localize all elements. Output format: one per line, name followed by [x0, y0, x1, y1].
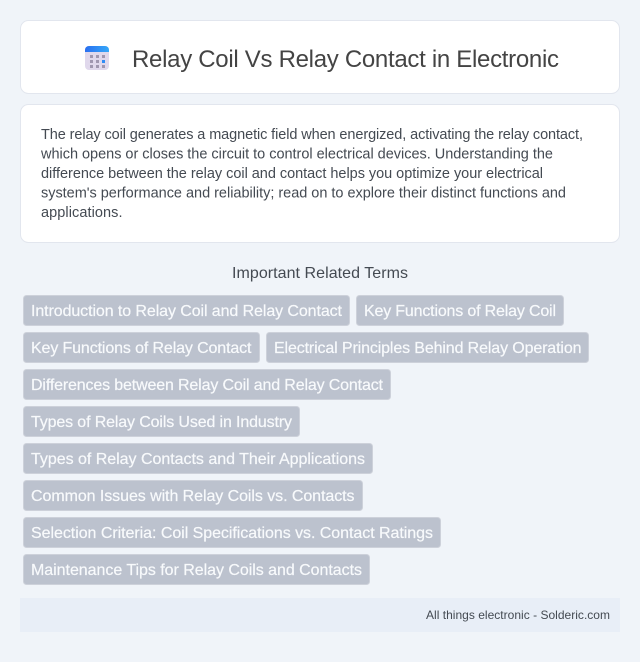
tag: maintenance tips — [24, 554, 370, 584]
tag: common issues — [24, 480, 362, 510]
tag: types of coils: Types of Relay Coils Used in Industry — [31, 414, 292, 431]
tag: selection criteria: Selection Criteria: Coil Specifications vs. Contact Ratings — [31, 525, 433, 542]
tag: functions of contact: Key Functions of Relay Contact — [31, 340, 252, 357]
text block: description — [40, 127, 583, 221]
tag: electrical principles — [266, 332, 588, 362]
tag: functions of coil: Key Functions of Relay Coil — [364, 303, 556, 320]
text block: description: system's performance and reliability; read on to explore their distinct functions and — [41, 186, 566, 202]
panel: header — [20, 20, 620, 94]
footer credit: All things electronic - Solderic.com — [426, 608, 610, 622]
tag: common issues: Common Issues with Relay Coils vs. Contacts — [31, 488, 354, 505]
text block: description: which opens or closes the circuit to control electrical devices. Understanding the — [40, 146, 553, 162]
tag: functions of contact — [24, 332, 260, 362]
panel: description — [20, 104, 620, 242]
tag: types of contacts: Types of Relay Contacts and Their Applications — [31, 451, 365, 468]
text block: description: The relay coil generates a magnetic field when energized, activating the relay contact, — [41, 127, 583, 143]
footer — [20, 598, 620, 632]
tag list — [24, 296, 588, 584]
title: Relay Coil Vs Relay Contact in Electronic — [132, 46, 559, 73]
tag: differences: Differences between Relay Coil and Relay Contact — [31, 377, 384, 394]
tag: differences — [24, 370, 390, 400]
tag: selection criteria — [24, 518, 440, 548]
tag: electrical principles: Electrical Principles Behind Relay Operation — [274, 340, 582, 357]
tag: functions of coil — [356, 296, 564, 326]
tag: introduction: Introduction to Relay Coil and Relay Contact — [31, 303, 343, 320]
text block: description: difference between the relay coil and contact helps you optimize your electrical — [41, 166, 543, 182]
tag: types of contacts — [24, 444, 372, 474]
heading: important related terms: Important Related Terms — [232, 265, 408, 282]
tag: types of coils — [24, 406, 300, 436]
text block: description: applications. — [41, 205, 122, 221]
tag: maintenance tips: Maintenance Tips for Relay Coils and Contacts — [31, 562, 362, 579]
tag: introduction — [24, 296, 350, 326]
icon: calendar grid — [85, 46, 109, 70]
